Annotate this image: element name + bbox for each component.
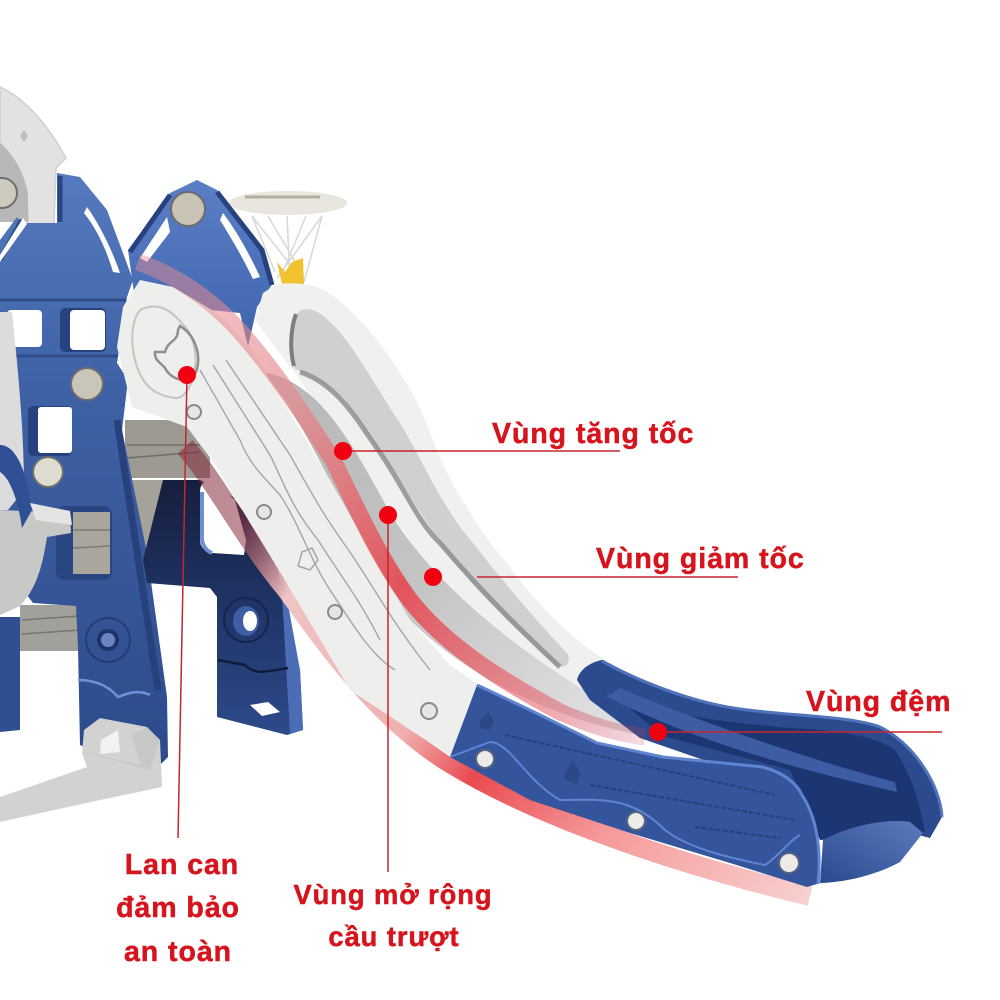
annotation: Lan can đảm bảo an toàn: Lan can [125, 849, 239, 881]
grey stairs behind tower [20, 420, 210, 651]
slide channel [262, 372, 640, 735]
annotation: Vùng mở rộng cầu trượt: cầu trượt [328, 921, 460, 952]
rail emblem [155, 326, 198, 380]
annotation: Lan can đảm bảo an toàn: an toàn [124, 936, 232, 968]
left tower windows [7, 310, 42, 347]
slide right rail [255, 283, 606, 700]
annotation: Lan can đảm bảo an toàn [116, 366, 240, 968]
annotation: Vùng đệm: Vùng đệm [806, 686, 951, 718]
slide blue end back [577, 660, 942, 840]
annotation: Vùng mở rộng cầu trượt [293, 506, 493, 952]
tower left [0, 173, 168, 775]
annotation: Vùng tăng tốc [334, 418, 694, 460]
annotation: Vùng giảm tốc [424, 543, 805, 586]
post bottom left [0, 617, 20, 732]
slide blue lip [820, 821, 923, 883]
annotation: Vùng giảm tốc: Vùng giảm tốc [596, 543, 805, 575]
illustration: slide set [0, 87, 942, 896]
channel pocket [292, 309, 569, 667]
slide blue side [450, 685, 820, 887]
swing foot [0, 718, 162, 822]
swing seat [0, 312, 72, 615]
bolts [33, 368, 103, 487]
annotation: Vùng đệm [649, 686, 951, 741]
basketball hoop [229, 191, 347, 284]
wheel emblem [86, 618, 130, 662]
upper red band [138, 262, 645, 737]
slide left rail [117, 280, 480, 757]
lower red band [185, 447, 810, 896]
right leg [143, 480, 303, 735]
rail star [298, 548, 318, 570]
rail engraved lines [200, 360, 430, 670]
tower right [128, 180, 273, 347]
rail screws [187, 405, 437, 719]
left tower slits [84, 207, 120, 273]
blue side screws [476, 750, 799, 873]
annotation: Vùng tăng tốc: Vùng tăng tốc [492, 418, 694, 450]
grey star arch [0, 87, 66, 224]
annotation: Lan can đảm bảo an toàn: đảm bảo [116, 892, 240, 924]
annotation: Vùng mở rộng cầu trượt: Vùng mở rộng [293, 879, 493, 910]
